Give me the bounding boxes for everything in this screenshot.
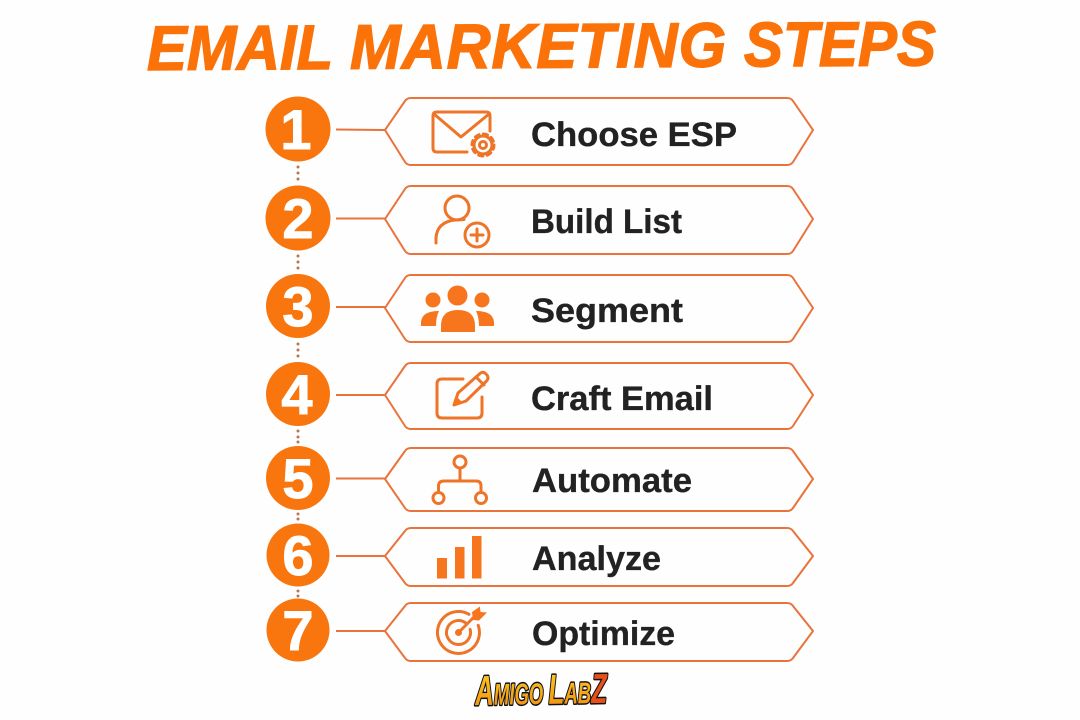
connector line 3 — [336, 306, 385, 308]
icon: user with plus — [436, 196, 489, 247]
step 7: optimize — [266, 598, 813, 662]
title — [147, 9, 936, 84]
number badge 4: 4 — [281, 363, 313, 426]
step label: Segment: Segment — [531, 292, 683, 330]
step label: Optimize: Optimize — [532, 615, 675, 653]
step 1: choose ESP — [266, 96, 813, 165]
icon: envelope with gear — [433, 112, 494, 156]
number badge 7 — [266, 598, 330, 662]
connector line 6 — [336, 555, 385, 557]
icon: group of people — [421, 286, 494, 332]
number badge 5: 5 — [282, 447, 314, 510]
step label: Automate: Automate — [532, 462, 692, 500]
number badge 7: 7 — [282, 599, 314, 662]
number badge 5 — [266, 446, 330, 510]
label box 5 — [385, 448, 813, 511]
step 4: craft email — [266, 362, 813, 429]
step label: Build List: Build List — [531, 203, 682, 241]
number badge 6: 6 — [282, 524, 314, 587]
label box 7 — [385, 603, 813, 661]
title: MARKETING — [350, 11, 727, 83]
icon: bar chart — [437, 536, 482, 578]
number badge 3: 3 — [282, 275, 314, 338]
label box 1 — [385, 98, 813, 165]
icon: pencil on square — [437, 372, 488, 418]
number badge 6 — [266, 524, 330, 587]
title: STEPS — [744, 9, 936, 80]
title: EMAIL — [147, 13, 333, 84]
step label: Analyze: Analyze — [532, 540, 661, 578]
step 2: build list — [266, 186, 813, 254]
logo: Amigo LabZ: AMIGO LABZ — [474, 665, 608, 714]
number badge 1 — [266, 96, 330, 162]
number badge 2 — [266, 186, 330, 250]
icon: target with arrow — [437, 606, 487, 653]
connector line 4 — [336, 394, 385, 396]
number badge 3 — [266, 274, 330, 338]
connector line 7 — [336, 630, 385, 632]
label box 2 — [385, 186, 813, 254]
step 5: automate — [266, 446, 813, 511]
connector line 5 — [336, 478, 385, 480]
step label: Craft Email: Craft Email — [531, 380, 713, 418]
dotted connectors between steps — [296, 166, 300, 598]
step label: Choose ESP: Choose ESP — [531, 116, 737, 154]
label box 6 — [385, 528, 813, 586]
label box 3 — [385, 275, 813, 342]
connector line 1 — [336, 128, 385, 131]
number badge 4 — [266, 362, 330, 426]
number badge 1: 1 — [280, 98, 312, 161]
step 6: analyze — [266, 524, 813, 587]
step 3: segment — [266, 274, 813, 342]
icon: workflow nodes — [433, 456, 486, 504]
number badge 2: 2 — [282, 187, 314, 250]
connector line 2 — [336, 218, 385, 220]
label box 4 — [385, 363, 813, 429]
